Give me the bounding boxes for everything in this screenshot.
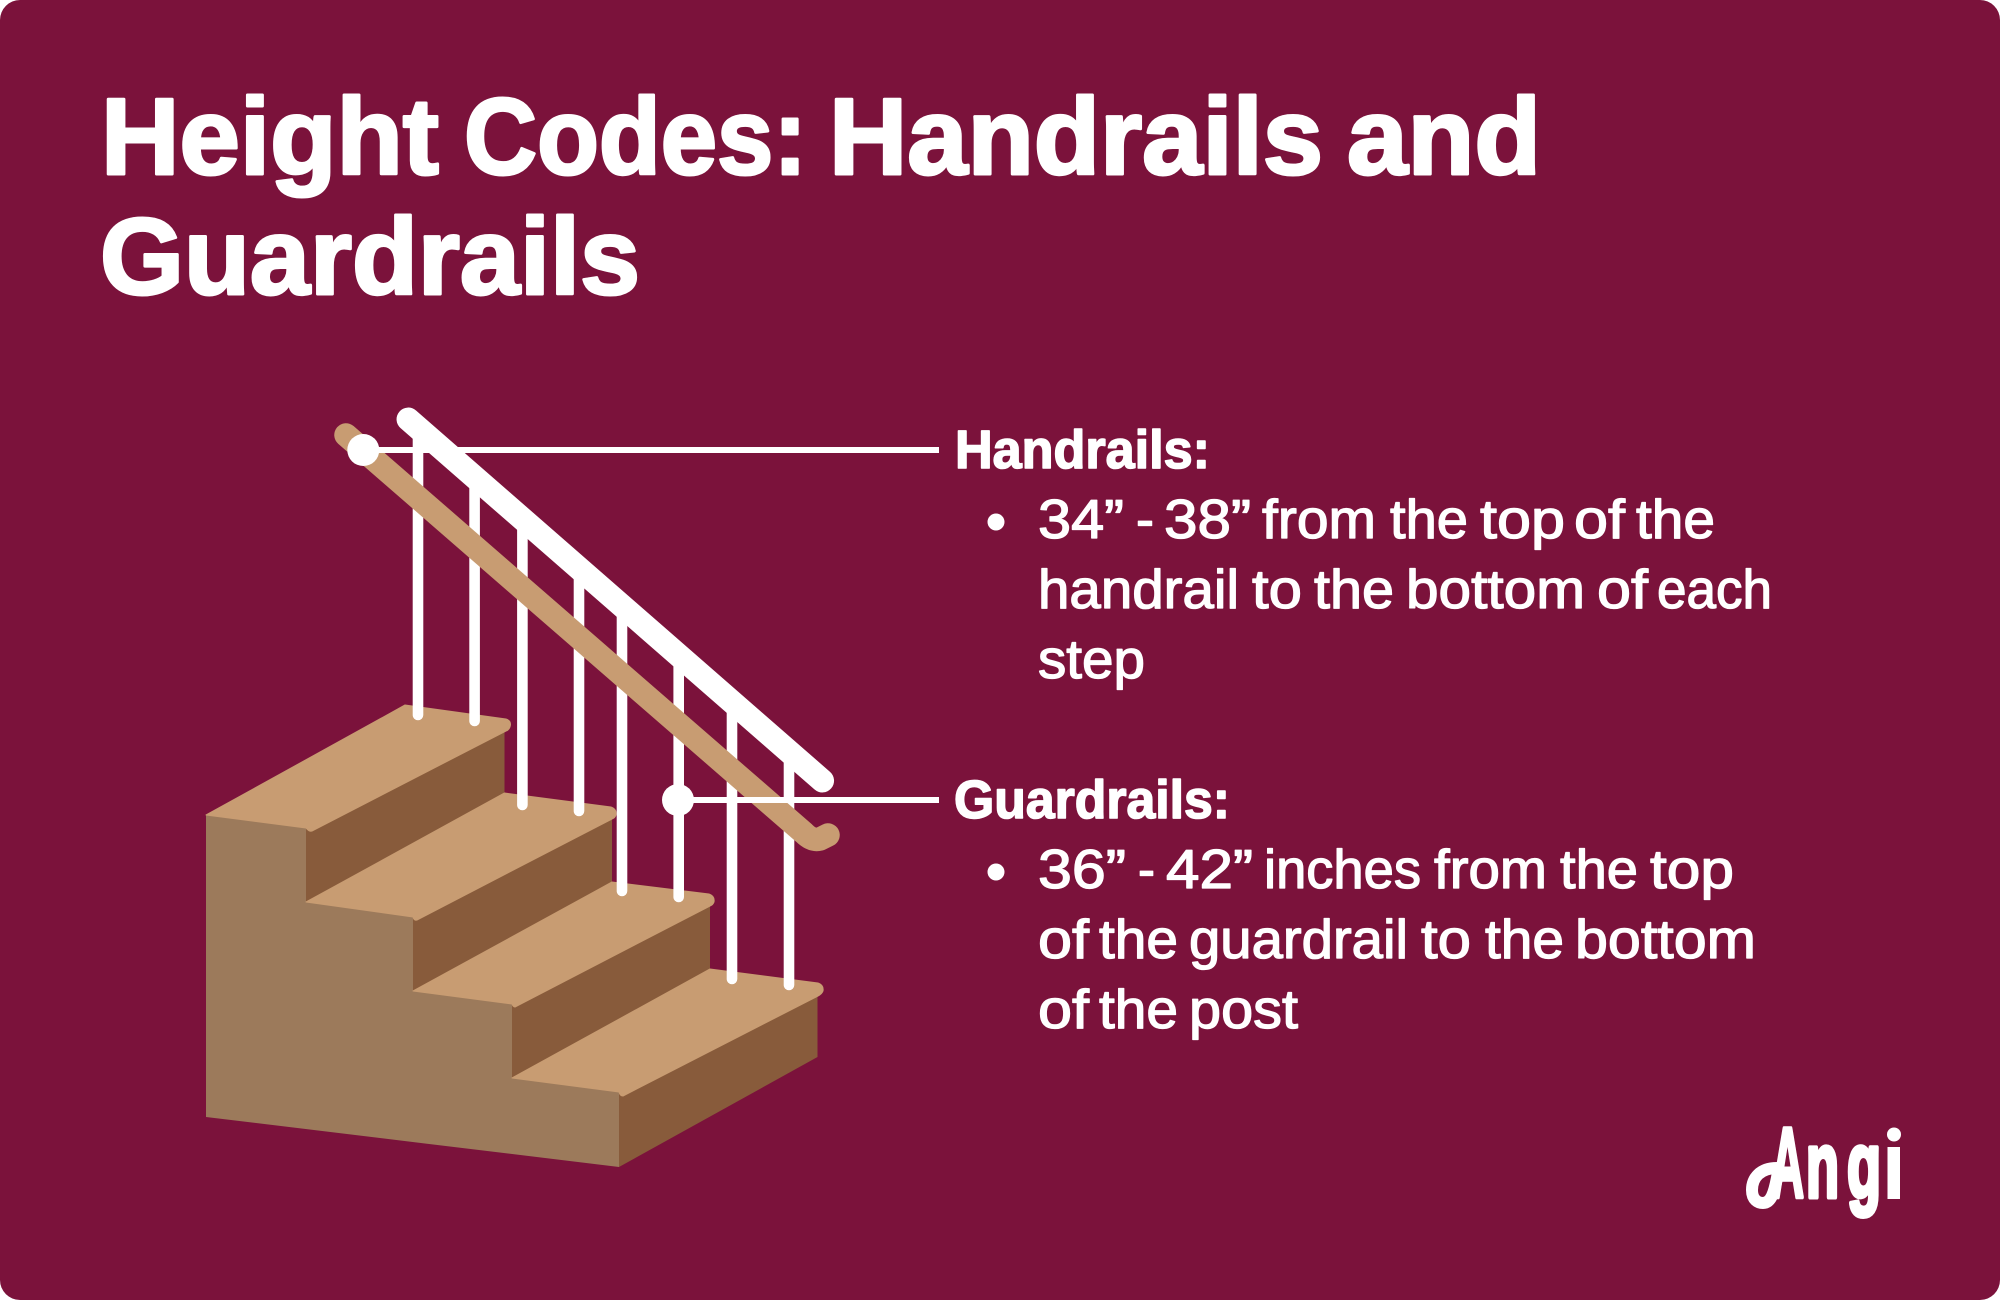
guardrail callout line and dot [662, 784, 939, 816]
handrails description: handrail [1038, 558, 1239, 620]
Angi logo [1752, 1107, 1901, 1218]
Angi logo: g [1847, 1113, 1881, 1217]
Angi logo: n [1806, 1113, 1839, 1217]
title: Handrails [829, 76, 1323, 198]
staircase illustration [206, 705, 823, 1167]
guardrails description: - [1138, 838, 1155, 900]
handrails description: each [1657, 558, 1772, 620]
Angi logo: A [1771, 1107, 1804, 1218]
handrail callout line and dot [347, 434, 939, 466]
guardrails description: to [1421, 908, 1471, 970]
handrails description: - [1136, 488, 1154, 550]
balusters [418, 427, 789, 985]
handrails description: the [1314, 558, 1394, 620]
guardrails description: the [1099, 908, 1178, 970]
handrails description: top [1480, 488, 1565, 550]
guardrails description: of [1038, 978, 1090, 1040]
handrails description [1038, 488, 1772, 690]
guardrails description: post [1189, 978, 1298, 1040]
title [100, 76, 1541, 318]
handrails description: of [1574, 488, 1626, 550]
title: Height [101, 76, 439, 198]
guardrails description: 42” [1166, 838, 1253, 900]
stair side wall [206, 815, 619, 1167]
guardrails bullet [988, 864, 1004, 880]
handrails description: of [1597, 558, 1649, 620]
handrails description: bottom [1406, 558, 1585, 620]
guardrails description: inches [1264, 838, 1421, 900]
guardrails description: the [1560, 838, 1638, 900]
handrails description: to [1252, 558, 1302, 620]
handrails description: 38” [1164, 488, 1251, 550]
stair treads [206, 705, 823, 1096]
guardrails description: the [1485, 908, 1564, 970]
guardrails description: from [1434, 838, 1547, 900]
handrails description: step [1038, 628, 1145, 690]
guardrails description: of [1038, 908, 1090, 970]
handrails bullet [988, 514, 1004, 530]
title: Guardrails [100, 196, 640, 318]
guardrails description: 36” [1038, 838, 1126, 900]
stair risers [306, 730, 818, 1167]
handrail [346, 435, 828, 839]
handrails description: from [1262, 488, 1376, 550]
handrails description: the [1636, 488, 1715, 550]
handrails text block [955, 420, 1772, 690]
guardrails text block [954, 770, 1756, 1040]
title: and [1347, 76, 1541, 198]
handrails description: 34” [1038, 488, 1124, 550]
guardrails description: guardrail [1189, 908, 1408, 970]
handrails description: the [1390, 488, 1468, 550]
guardrail [408, 419, 822, 781]
guardrails description [1038, 838, 1756, 1040]
guardrails heading: Guardrails: [954, 770, 1230, 830]
guardrails description: top [1650, 838, 1734, 900]
guardrails description: bottom [1575, 908, 1756, 970]
guardrails description: the [1099, 978, 1178, 1040]
handrails heading: Handrails: [955, 420, 1210, 480]
title: Codes: [464, 76, 807, 198]
